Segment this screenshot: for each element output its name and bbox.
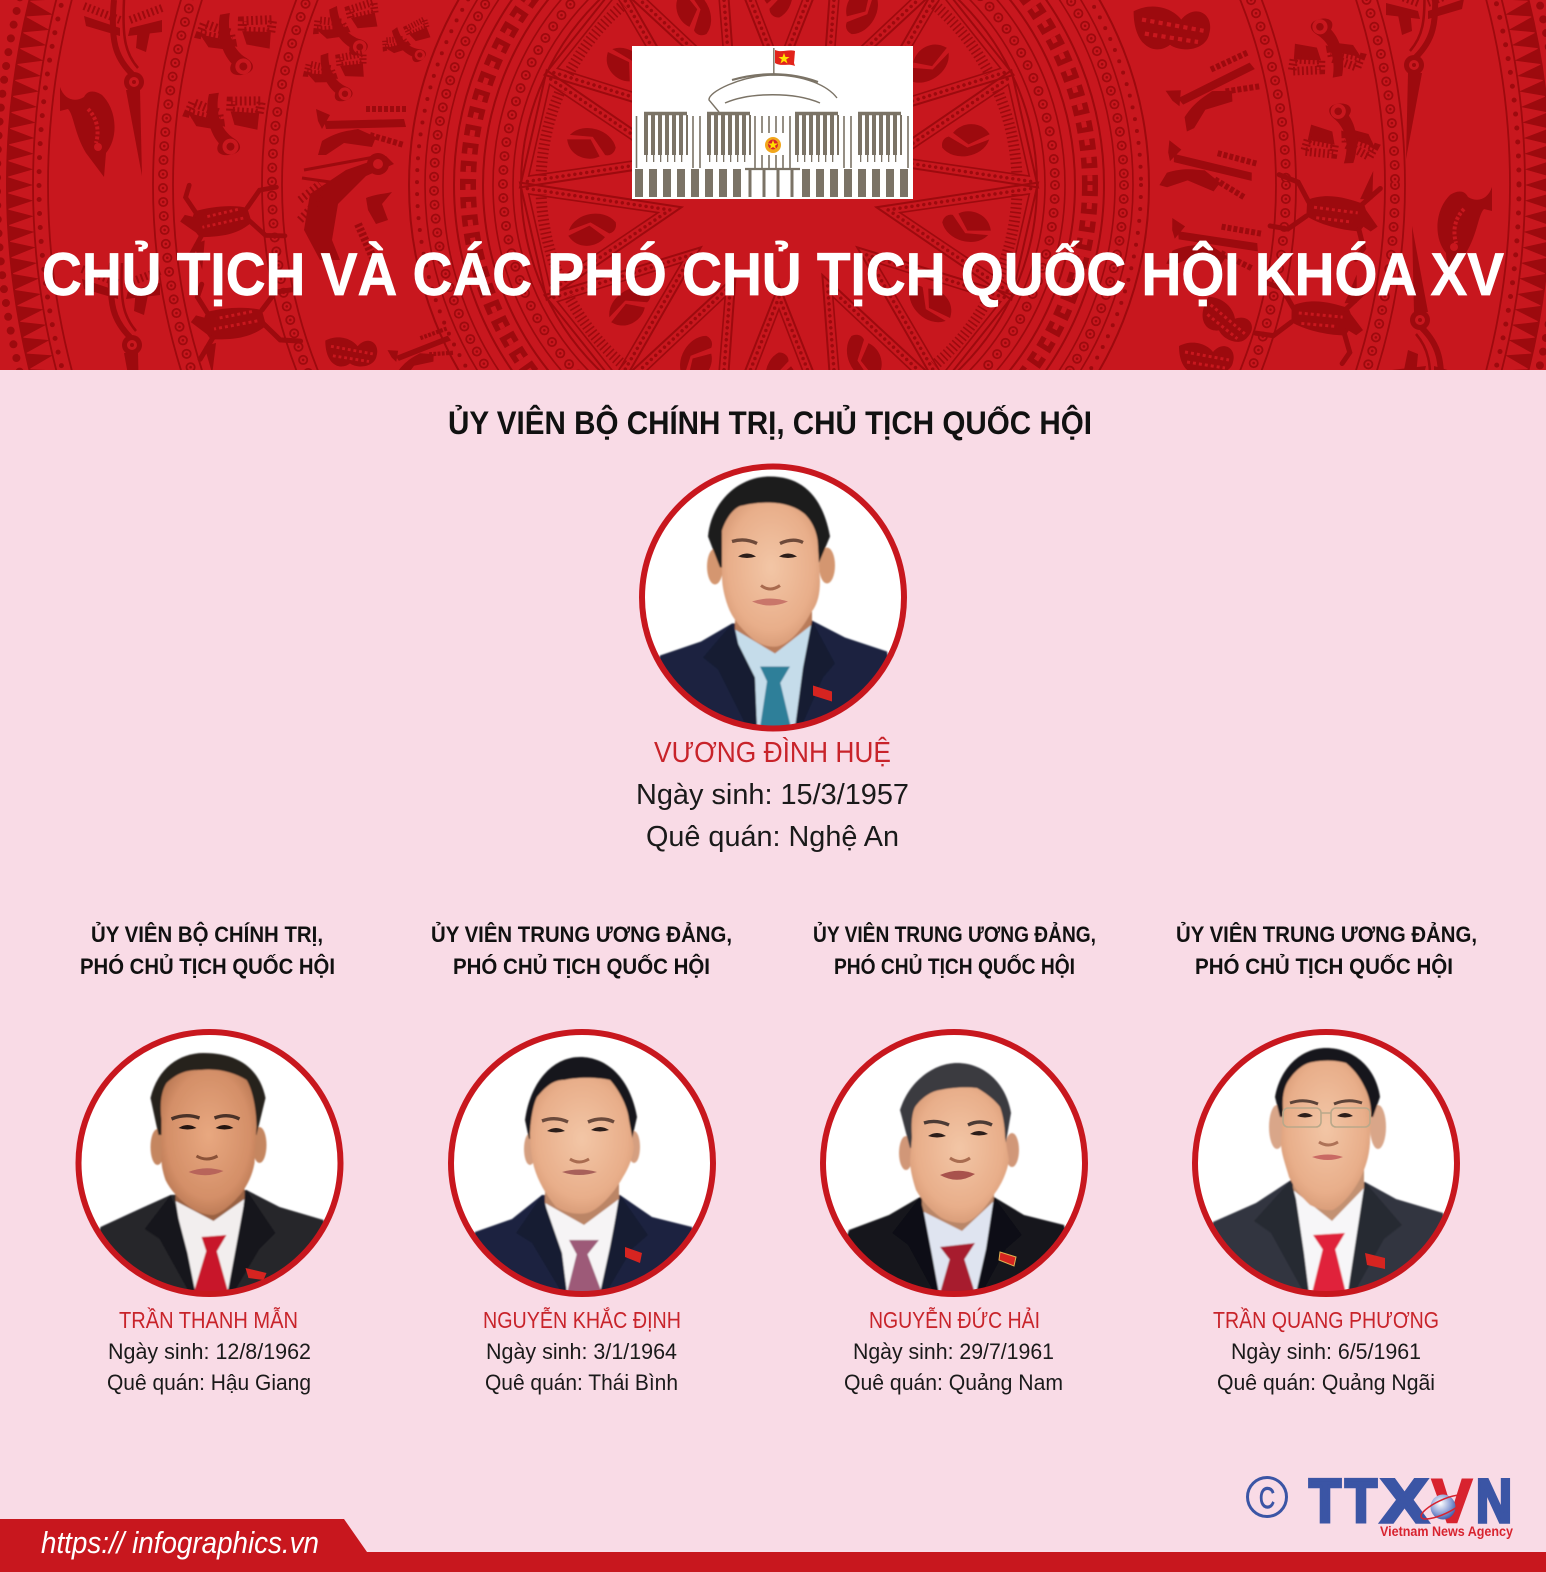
- logo: TTXVN: X: [1381, 1467, 1428, 1535]
- hometown: Quê quán: Quảng Nam: [844, 1370, 1063, 1395]
- portrait: [823, 1032, 1085, 1303]
- header banner: [0, 0, 1546, 370]
- hometown: Quê quán: Nghệ An: [646, 821, 899, 853]
- birth date: Ngày sinh: 6/5/1961: [1231, 1339, 1421, 1364]
- hometown: Quê quán: Thái Bình: [485, 1370, 678, 1395]
- hometown: Quê quán: Quảng Ngãi: [1217, 1370, 1435, 1395]
- role heading: ỦY VIÊN TRUNG ƯƠNG ĐẢNG,: [1176, 922, 1477, 947]
- portrait: Vương Đình Huệ: [642, 466, 904, 738]
- birth date: Ngày sinh: 12/8/1962: [108, 1339, 311, 1364]
- name: TRẦN THANH MẪN: [119, 1305, 298, 1333]
- portrait: [78, 1032, 340, 1303]
- birth date: Ngày sinh: 29/7/1961: [853, 1339, 1054, 1364]
- role heading: ỦY VIÊN TRUNG ƯƠNG ĐẢNG,: [431, 922, 732, 947]
- icon: copyright: C: [1259, 1482, 1275, 1515]
- name: TRẦN QUANG PHƯƠNG: [1213, 1306, 1439, 1333]
- heading: chairman role: ỦY VIÊN BỘ CHÍNH TRỊ, CHỦ TỊCH QUỐC HỘI: [448, 405, 1092, 441]
- icon: flag: [773, 48, 795, 74]
- role heading: PHÓ CHỦ TỊCH QUỐC HỘI: [453, 953, 710, 979]
- logo: TTXVN: [1309, 1467, 1513, 1539]
- icon: columns: [635, 114, 912, 197]
- role heading: PHÓ CHỦ TỊCH QUỐC HỘI: [834, 953, 1075, 979]
- role heading: [431, 922, 732, 979]
- icon: dome: [709, 74, 837, 112]
- role heading: ỦY VIÊN TRUNG ƯƠNG ĐẢNG,: [813, 922, 1096, 947]
- icon: copyright: [1248, 1478, 1286, 1516]
- name: VƯƠNG ĐÌNH HUỆ: [654, 736, 891, 769]
- portrait: [1195, 1032, 1457, 1303]
- logo: TTXVN: T: [1309, 1467, 1341, 1535]
- birth date: Ngày sinh: 3/1/1964: [486, 1339, 677, 1364]
- birth date: Ngày sinh: 15/3/1957: [636, 779, 909, 811]
- panel: vice chairman Trần Thanh Mẫn: [78, 922, 340, 1395]
- panel: vice chairman Nguyễn Đức Hải: [813, 922, 1096, 1395]
- role heading: ỦY VIÊN BỘ CHÍNH TRỊ,: [91, 922, 323, 947]
- national assembly logo: [632, 46, 913, 199]
- role heading: [813, 922, 1096, 979]
- logo: TTXVN: T: [1345, 1467, 1377, 1535]
- hometown: Quê quán: Hậu Giang: [107, 1370, 311, 1395]
- portrait: [451, 1032, 713, 1303]
- panel: chairman: [448, 405, 1092, 853]
- icon: national emblem: [765, 137, 781, 153]
- role heading: [1176, 922, 1477, 979]
- role heading: [80, 922, 335, 979]
- logo: TTXVN: V: [1432, 1467, 1472, 1535]
- panel: vice chairman Trần Quang Phương: [1176, 922, 1477, 1395]
- logo: TTXVN: N: [1476, 1467, 1512, 1535]
- bronze drum pattern: [0, 0, 1546, 370]
- name: NGUYỄN KHẮC ĐỊNH: [483, 1305, 681, 1333]
- role heading: PHÓ CHỦ TỊCH QUỐC HỘI: [1195, 953, 1453, 979]
- icon: globe: [1418, 1491, 1468, 1523]
- name: NGUYỄN ĐỨC HẢI: [869, 1305, 1040, 1333]
- role heading: PHÓ CHỦ TỊCH QUỐC HỘI: [80, 953, 335, 979]
- logo: TTXVN: Vietnam News Agency: [1380, 1524, 1513, 1539]
- website url: https:// infographics.vn: [41, 1525, 319, 1560]
- footer bar: [0, 1519, 1546, 1572]
- panel: vice chairman Nguyễn Khắc Định: [431, 922, 732, 1395]
